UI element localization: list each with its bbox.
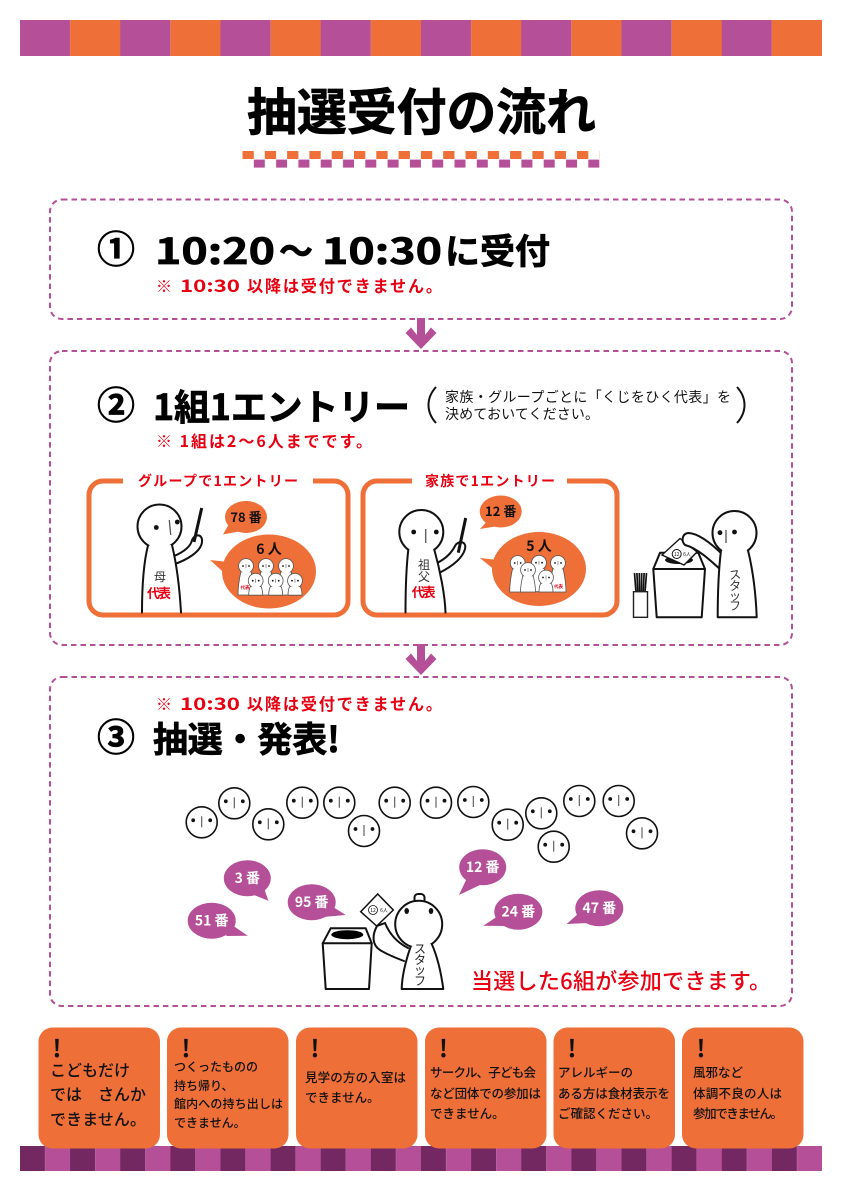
step 1 note: ※ (156, 273, 172, 297)
bubble: 5 people (480, 532, 586, 606)
step 2 parenthetical note: 家族・グループごとに「くじをひく代表」を (445, 387, 731, 407)
panel: step 2 (50, 351, 792, 645)
bubble: 6 people: 6 人 (256, 539, 282, 559)
step 3 red note (156, 690, 442, 715)
notice card: groups: できません。 (430, 1103, 505, 1122)
figure: grandfather with pen (399, 510, 466, 612)
winners note: 当選した6組が参加できます。 (471, 964, 771, 996)
figure: staff dropping ticket: フ (729, 597, 741, 614)
panel: step 3 (50, 677, 792, 1006)
step 3 heading: 抽選・発表! (153, 712, 340, 763)
notice card: allergy: ある方は食材表示を (558, 1083, 670, 1102)
notice card: no take-out (167, 1028, 288, 1148)
bubble: 5 people: 代表 (554, 583, 563, 590)
arrow: step 1 to 2 (406, 318, 436, 349)
ticket: 12 (370, 907, 376, 914)
step 1 note (156, 272, 442, 297)
step 3 red note: 10:30 (180, 690, 240, 715)
figure: staff drawing a ticket: ッ (414, 961, 426, 978)
family entry heading: 家族で1エントリー (425, 471, 555, 491)
icon: pencil cup (634, 573, 648, 617)
notice card: allergy: ご確認ください。 (558, 1103, 658, 1122)
notice card: groups: ! (439, 1029, 448, 1064)
notice card: children only (38, 1028, 160, 1148)
bubble: 6 people (210, 534, 316, 608)
bubble: 3 (224, 860, 271, 901)
figure: staff dropping ticket: ッ (729, 587, 741, 604)
figure: staff drawing a ticket: フ (414, 972, 426, 989)
checker underline (242, 151, 600, 168)
notice card: groups (425, 1028, 546, 1148)
panel: step 1 (50, 200, 792, 319)
notice card: unwell: ! (697, 1029, 705, 1064)
notice card: children only: できません。 (50, 1106, 146, 1130)
step 2 parenthetical note: 決めておいてください。 (445, 404, 599, 424)
bubble: 12: 12 番 (466, 857, 500, 877)
step 3 red note: 以降は受付できません。 (247, 691, 442, 715)
notice card: no take-out: 持ち帰り、 (174, 1077, 234, 1094)
bubble: 51: 51 番 (195, 910, 229, 930)
panel: family entry (363, 471, 617, 615)
bottom stripe band (20, 1146, 822, 1171)
notice card: observers (296, 1028, 418, 1148)
notice card: no take-out: ! (182, 1029, 190, 1064)
arrow: step 2 to 3 (406, 644, 436, 675)
figure: staff drawing a ticket: タ (414, 951, 426, 968)
figure: mother with pen (138, 504, 202, 612)
step 1 heading: に受付 (445, 224, 550, 275)
bubble: 5 people: 5 人 (526, 536, 552, 556)
figure: staff dropping ticket (683, 511, 757, 617)
notice card: groups: など団体での参加は (430, 1083, 541, 1102)
notice card: observers: できません。 (305, 1087, 380, 1106)
bubble: 47: 47 番 (582, 898, 616, 918)
bubble: 24 (483, 894, 542, 930)
bubble: 51 (188, 903, 248, 939)
figure: mother with pen: 代表 (147, 583, 171, 602)
notice card: no take-out: できません。 (174, 1114, 246, 1131)
notice card: children only: では さんか (50, 1081, 146, 1105)
notice card: observers: ! (311, 1029, 319, 1064)
bubble: 24: 24 番 (501, 902, 535, 922)
step 2 red note: ※ 1組は2〜6人までです。 (156, 428, 372, 452)
notice card: unwell (682, 1028, 804, 1148)
bubble: 6 people: 代表 (240, 584, 250, 591)
step 1 heading (155, 223, 550, 275)
step 1 number: ① (97, 219, 135, 274)
figure: mother with pen: 母 (154, 568, 166, 585)
step 2 parenthetical note (428, 387, 744, 424)
notice card: allergy (554, 1028, 675, 1148)
bubble: number 78 (223, 501, 267, 534)
notice card: observers: 見学の方の入室は (305, 1067, 406, 1086)
notice card: unwell: 体調不良の人は (693, 1083, 782, 1102)
bubble: 12 (459, 849, 506, 895)
step 1 heading: 10:20 (155, 223, 275, 275)
step 2 heading: 1組1エントリー (153, 379, 410, 431)
icon: lottery box with ticket: 12 (674, 551, 680, 558)
step 3 number: ③ (97, 707, 135, 762)
bubble: 95: 95 番 (295, 892, 329, 912)
notice card: no take-out: つくったものの (174, 1058, 258, 1075)
bubble: number 12: 12 番 (485, 501, 516, 520)
bubble: number 78: 78 番 (230, 507, 262, 526)
title: 抽選受付の流れ (247, 73, 596, 145)
bubble: 47 (567, 890, 623, 926)
step 1 note: 10:30 (180, 272, 240, 297)
figure: staff dropping ticket: ス (728, 565, 742, 584)
figure: staff drawing a ticket: ス (414, 940, 426, 957)
icon: lottery box with ticket (653, 538, 705, 617)
bubble: number 12 (480, 496, 522, 529)
step 2 number: ② (97, 375, 135, 430)
notice card: children only: こどもだけ (50, 1057, 130, 1081)
icon: lottery box with ticket: 6人 (683, 551, 691, 558)
icon: lottery box (323, 928, 372, 989)
notice card: no take-out: 館内への持ち出しは (174, 1095, 283, 1112)
bubble: 3: 3 番 (235, 868, 260, 888)
ticket: 6人 (380, 907, 388, 914)
figure: staff dropping ticket: タ (729, 577, 741, 594)
step 1 heading: 〜 (279, 223, 313, 275)
top stripe band (20, 20, 822, 56)
notice card: groups: サークル、子ども会 (430, 1062, 536, 1081)
bubble: 95 (288, 884, 346, 920)
notice card: allergy: アレルギーの (558, 1062, 633, 1081)
figure: staff drawing a ticket (361, 894, 443, 989)
figure: grandfather with pen: 代表 (412, 582, 436, 601)
step 3 red note: ※ (156, 691, 172, 715)
panel: group entry (89, 471, 348, 615)
group entry heading: グループで1エントリー (138, 471, 298, 491)
step 1 heading: 10:30 (322, 223, 442, 275)
notice card: children only: ! (53, 1029, 61, 1064)
notice card: allergy: ! (568, 1029, 576, 1064)
notice card: unwell: 参加できません。 (693, 1103, 783, 1122)
notice card: unwell: 風邪など (693, 1062, 744, 1081)
figure: grandfather with pen: 祖 (418, 556, 430, 573)
figure: grandfather with pen: 父 (418, 568, 430, 585)
crowd of faces (186, 786, 657, 862)
ticket (361, 894, 393, 926)
step 1 note: 以降は受付できません。 (247, 273, 442, 297)
